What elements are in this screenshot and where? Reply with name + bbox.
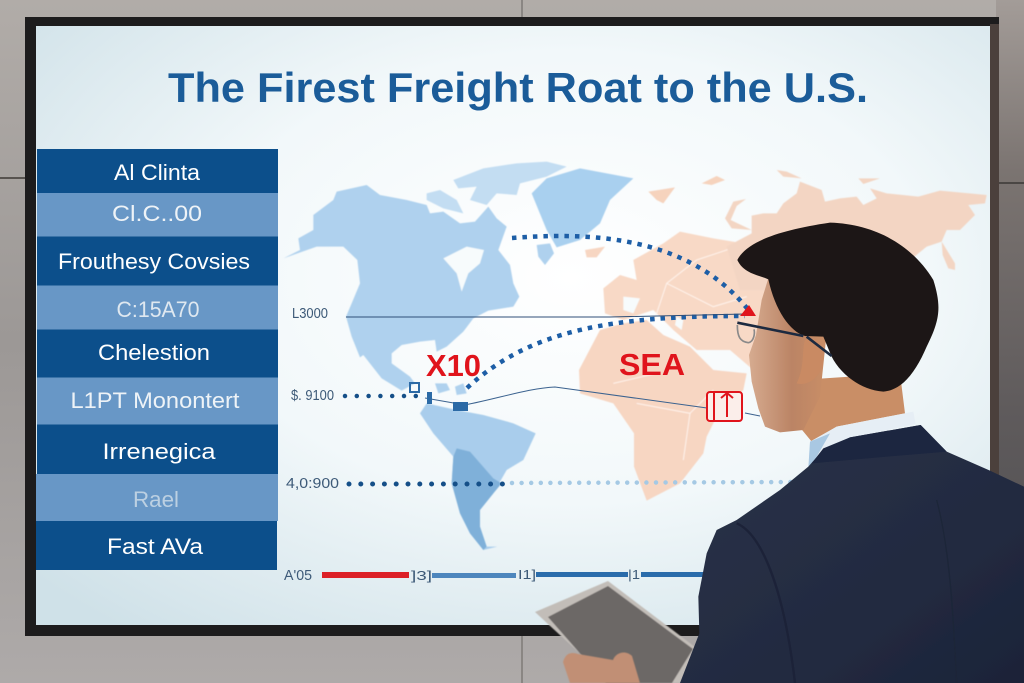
icon: red box marker bbox=[707, 392, 742, 421]
label A'05: A'05 bbox=[284, 568, 312, 584]
route: dotted row 2 bbox=[345, 394, 420, 398]
person: glasses bbox=[737, 323, 832, 356]
row 2: Cl.C..00 bbox=[112, 201, 202, 226]
map: africa bbox=[579, 320, 747, 501]
timeline bar: I1] bbox=[518, 567, 536, 582]
map: asia bbox=[727, 182, 987, 290]
person: face bbox=[749, 278, 827, 432]
title: The Firest Freight Roat to the U.S. bbox=[168, 64, 868, 111]
map: central america islands bbox=[435, 383, 467, 395]
timeline bar: |1 bbox=[628, 567, 640, 582]
map: inland sea bbox=[623, 297, 683, 330]
row 8: Rael bbox=[133, 487, 179, 512]
route lines bbox=[345, 236, 800, 484]
row 6 bbox=[37, 378, 278, 424]
timeline bar bbox=[322, 567, 707, 583]
route: dotted row 3 dark bbox=[349, 482, 505, 486]
row 3 bbox=[37, 236, 278, 286]
hand bbox=[563, 653, 640, 683]
row 4: C:15A70 bbox=[116, 297, 200, 322]
route: thin line lower bbox=[425, 387, 760, 416]
route: dotted row 3 light bbox=[512, 482, 800, 483]
panel: left list bbox=[36, 149, 278, 570]
person: lapel bbox=[812, 425, 947, 463]
map: greenland bbox=[532, 168, 633, 247]
icon: red arrow head bbox=[740, 305, 756, 316]
map: svalbard bbox=[702, 176, 725, 185]
person bbox=[680, 223, 1024, 683]
map: arctic islands bbox=[427, 162, 567, 213]
map: road lines bbox=[613, 243, 747, 460]
person: suit jacket bbox=[680, 425, 1024, 683]
route: lower dotted arc bbox=[467, 316, 745, 388]
row 5 bbox=[37, 330, 278, 378]
label L3000: L3000 bbox=[292, 306, 328, 322]
row 6: L1PT Monontert bbox=[70, 388, 240, 413]
person: sleeve seam bbox=[737, 523, 795, 683]
map: hudson bay bbox=[443, 247, 484, 292]
row 5: Chelestion bbox=[98, 340, 210, 365]
row 9 bbox=[36, 521, 277, 570]
map: south america shade bbox=[452, 448, 502, 550]
row 2 bbox=[37, 193, 278, 236]
person: hair bbox=[737, 223, 938, 392]
map: south america bbox=[420, 403, 536, 550]
map: north america bbox=[283, 185, 519, 391]
map: west islets bbox=[585, 247, 605, 257]
route: upper dotted arc bbox=[512, 236, 750, 312]
person: neck bbox=[797, 373, 905, 442]
label S.9100: $. 9100 bbox=[291, 388, 334, 404]
row 7 bbox=[37, 424, 278, 474]
row 4 bbox=[37, 286, 278, 330]
row 3: Frouthesy Covsies bbox=[58, 249, 250, 274]
route: thin line upper bbox=[346, 314, 745, 317]
row 1: Al Clinta bbox=[114, 160, 200, 185]
map: iberia europe bbox=[603, 232, 780, 377]
map: iceland east bbox=[648, 187, 675, 203]
map: arctic islets bbox=[777, 170, 880, 184]
row 1 bbox=[37, 149, 278, 193]
label X10: X10 bbox=[426, 348, 481, 383]
row 8 bbox=[36, 474, 278, 521]
label SEA: SEA bbox=[619, 347, 685, 382]
timeline bar: ]3] bbox=[411, 568, 432, 583]
axis labels bbox=[284, 306, 339, 584]
map: scandinavia crescent bbox=[725, 199, 752, 230]
tablet bbox=[535, 581, 695, 683]
person: ear bbox=[797, 338, 824, 384]
person: shirt collar bbox=[808, 412, 916, 468]
map: iceland west bbox=[537, 243, 554, 265]
row 9: Fast AVa bbox=[107, 534, 204, 559]
row 7: Irrenegica bbox=[102, 439, 216, 464]
label 4,0:900: 4,0:900 bbox=[286, 476, 339, 492]
world map bbox=[283, 162, 987, 550]
icons: port markers bbox=[410, 383, 468, 411]
